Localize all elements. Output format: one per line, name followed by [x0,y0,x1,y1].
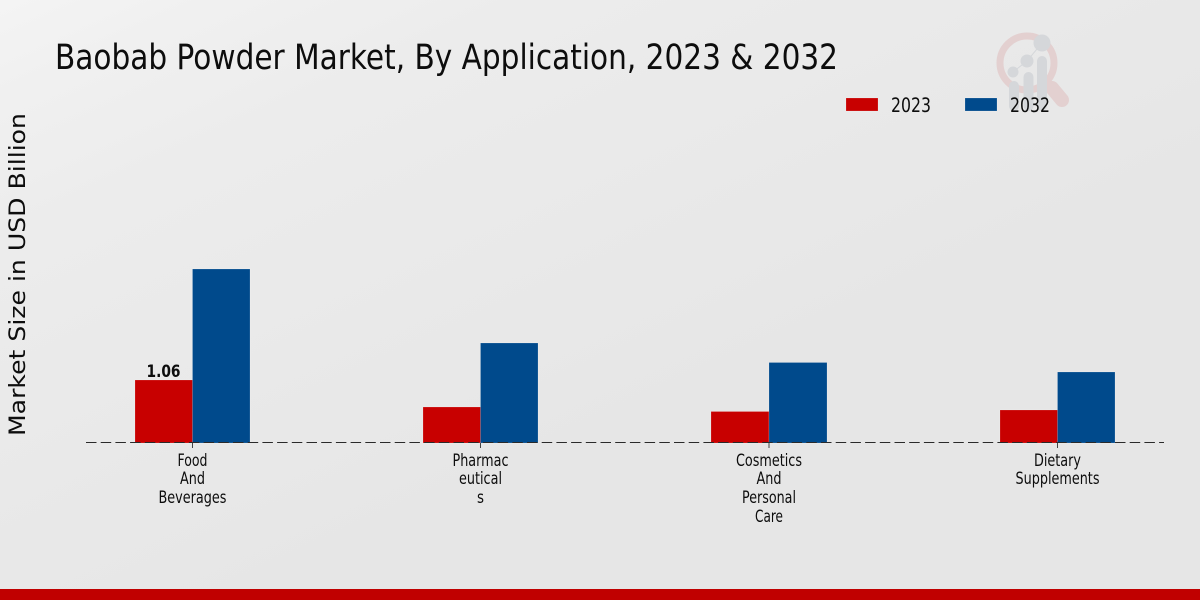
bars: Cosmetics And Personal Care [711,362,827,443]
y axis title: Market Size in USD Billion [5,113,31,436]
category label: Food And Beverages: And [180,469,205,488]
footer bar [0,589,1200,600]
category label: Pharmaceuticals: s [477,488,484,507]
category label: Pharmaceuticals: Pharmac [452,451,508,470]
category label: Food And Beverages [158,451,226,507]
category label: Food And Beverages: Food [178,451,208,470]
legend [846,94,1050,117]
category label: Pharmaceuticals [452,451,508,507]
category label: Food And Beverages: Beverages [158,488,226,507]
bar chart [86,269,1164,448]
category label: Pharmaceuticals: eutical [459,469,502,488]
category label: Dietary Supplements [1016,451,1100,488]
category label: Cosmetics And Personal Care: Cosmetics [736,451,802,470]
value label: 1.06 [146,362,180,381]
title: Baobab Powder Market, By Application, 2023 & 2032 [55,38,838,78]
category label: Cosmetics And Personal Care [736,451,802,526]
legend label 2023: 2023 [891,94,931,117]
axis ticks [192,443,1058,448]
category label: Cosmetics And Personal Care: And [756,469,782,488]
legend label 2032: 2032 [1010,94,1050,117]
x axis baseline [86,442,1164,444]
category label: Dietary Supplements: Supplements [1016,469,1100,488]
bars: Dietary Supplements [1000,372,1115,443]
category label: Cosmetics And Personal Care: Care [755,507,783,526]
bars: Food And Beverages [135,269,250,443]
category label: Dietary Supplements: Dietary [1034,451,1081,470]
watermark logo icon [1000,34,1062,111]
category label: Cosmetics And Personal Care: Personal [742,488,796,507]
bars: Pharmaceuticals [423,343,538,443]
legend swatch 2032 [965,98,997,111]
legend swatch 2023 [846,98,878,111]
